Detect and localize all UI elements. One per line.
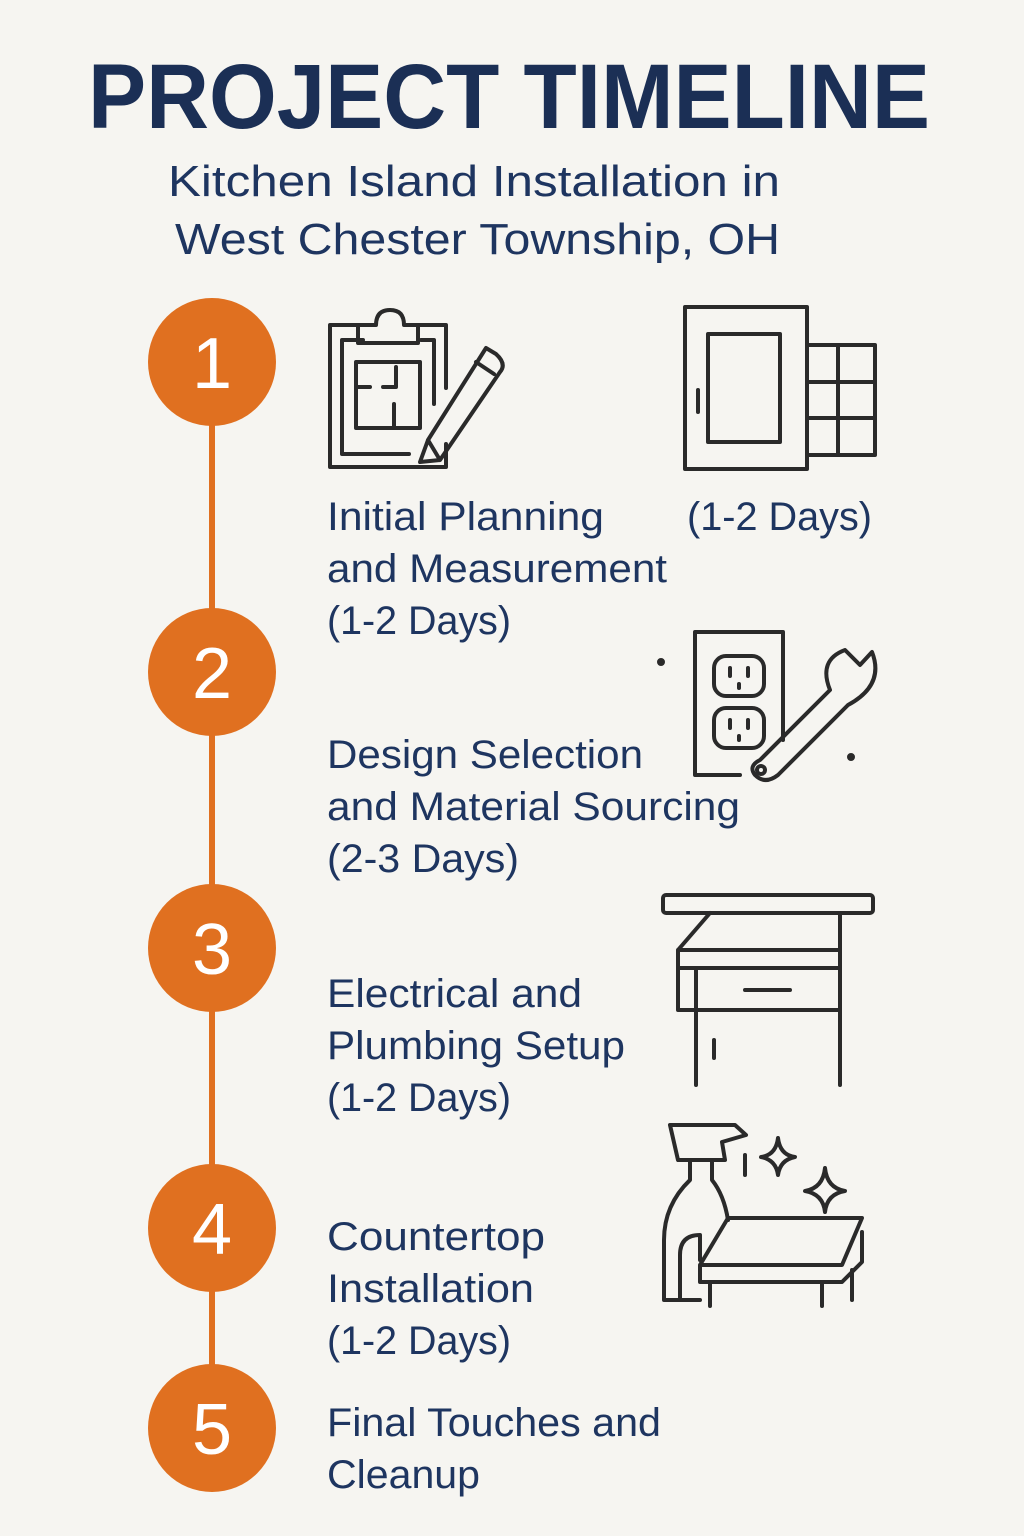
- step 2 text: [327, 733, 740, 881]
- icon: cabinet with tiles: [685, 307, 875, 469]
- icon: outlet and wrench: [659, 632, 875, 780]
- step markers: 1: [192, 324, 232, 404]
- icon: clipboard with pencil: [330, 310, 503, 467]
- step 2 text: (2-3 Days): [327, 837, 519, 881]
- step markers: 4: [192, 1190, 232, 1270]
- step markers: 3: [192, 910, 232, 990]
- step 4 text: Installation: [327, 1267, 534, 1311]
- step 3 text: [327, 972, 625, 1120]
- step markers: 2: [192, 634, 232, 714]
- step markers: 5: [192, 1390, 232, 1470]
- icon: spray bottle and table: [664, 1125, 862, 1306]
- step 2 text: and Material Sourcing: [327, 785, 740, 829]
- step 1 text: and Measurement: [327, 547, 667, 591]
- timeline line: [209, 362, 215, 1428]
- title: PROJECT TIMELINE: [88, 46, 930, 148]
- step 3 text: Electrical and: [327, 972, 582, 1016]
- subtitle: West Chester Township, OH: [175, 215, 780, 264]
- step 4 text: Countertop: [327, 1215, 545, 1259]
- step 3 text: (1-2 Days): [327, 1076, 511, 1120]
- step 5 text: [327, 1401, 661, 1497]
- step 1 text: (1-2 Days): [327, 599, 511, 643]
- step 2 text: Design Selection: [327, 733, 643, 777]
- step 1 text: [327, 495, 872, 643]
- step 1 text: Initial Planning: [327, 495, 604, 539]
- step 1 text: (1-2 Days): [687, 495, 872, 539]
- step 5 text: Final Touches and: [327, 1401, 661, 1445]
- step markers: [148, 298, 276, 1492]
- subtitle: Kitchen Island Installation in: [168, 157, 780, 206]
- icon: desk: [663, 895, 873, 1085]
- step 3 text: Plumbing Setup: [327, 1024, 625, 1068]
- step 4 text: (1-2 Days): [327, 1319, 511, 1363]
- subtitle: [168, 157, 780, 264]
- step 4 text: [327, 1215, 545, 1363]
- step 5 text: Cleanup: [327, 1453, 480, 1497]
